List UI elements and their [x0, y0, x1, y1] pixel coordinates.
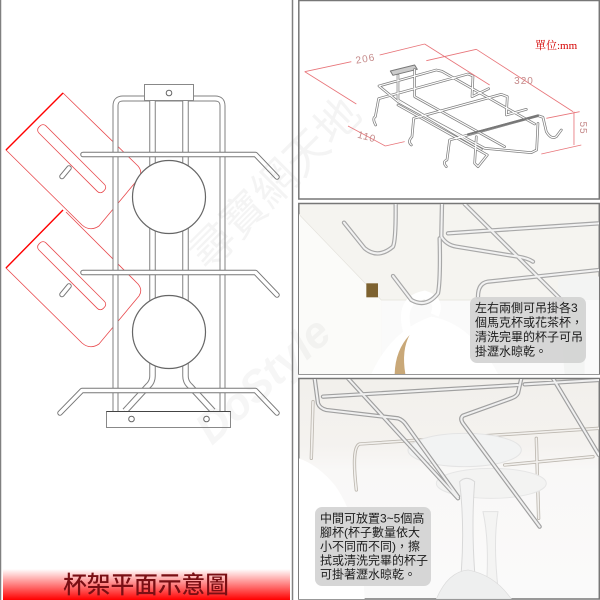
dimension labels: 206	[355, 52, 376, 67]
callout: wine glasses: 拭或清洗完畢的杯子	[320, 552, 428, 568]
icon: red mug outlines	[6, 93, 141, 347]
panel: isometric dimension drawing	[299, 0, 599, 199]
caption banner: 杯架平面示意圖	[63, 572, 229, 599]
callout: wine glasses: 可掛著瀝水晾乾。	[320, 566, 416, 582]
bottom mounting plate	[106, 412, 230, 428]
panel: rack plan drawing	[0, 0, 292, 600]
icon: cup base circle lower	[132, 296, 206, 368]
callout: side hooks	[470, 297, 586, 363]
watermark: shop name: 尋寶網天地	[180, 89, 371, 279]
top mounting plate	[144, 84, 194, 100]
callout: wine glasses	[315, 507, 431, 586]
photo scene: hooks and mug	[298, 203, 599, 374]
panel: photo of wine glasses	[299, 378, 599, 599]
icon: cup base circle upper	[132, 160, 206, 234]
rack isometric sketch	[374, 65, 561, 167]
watermark: style: DoStyle	[186, 307, 340, 453]
caption banner	[3, 569, 290, 600]
photo scene: rods and glasses	[299, 378, 599, 599]
callout: side hooks: 個馬克杯或花茶杯，	[475, 314, 583, 330]
callout: wine glasses: 小不同而不同)，擦	[320, 540, 420, 554]
rack hanging bars	[60, 154, 277, 413]
rack frame	[116, 98, 222, 411]
callout: wine glasses: 腳杯(杯子數量依大	[320, 524, 420, 540]
dimension lines	[305, 44, 581, 154]
unit label: 單位:mm	[535, 39, 578, 52]
dimension labels: 55	[577, 121, 588, 135]
callout: side hooks: 清洗完畢的杯子可吊	[475, 329, 583, 344]
dimension labels	[355, 52, 588, 145]
dimension labels: 110	[356, 130, 377, 145]
panel: photo of side hooks	[298, 203, 599, 374]
dimension labels: 320	[514, 76, 534, 87]
callout: wine glasses: 中間可放置3~5個高	[320, 510, 424, 526]
callout: side hooks: 左右兩側可吊掛各3	[475, 300, 578, 315]
callout: side hooks: 掛瀝水晾乾。	[475, 344, 547, 358]
